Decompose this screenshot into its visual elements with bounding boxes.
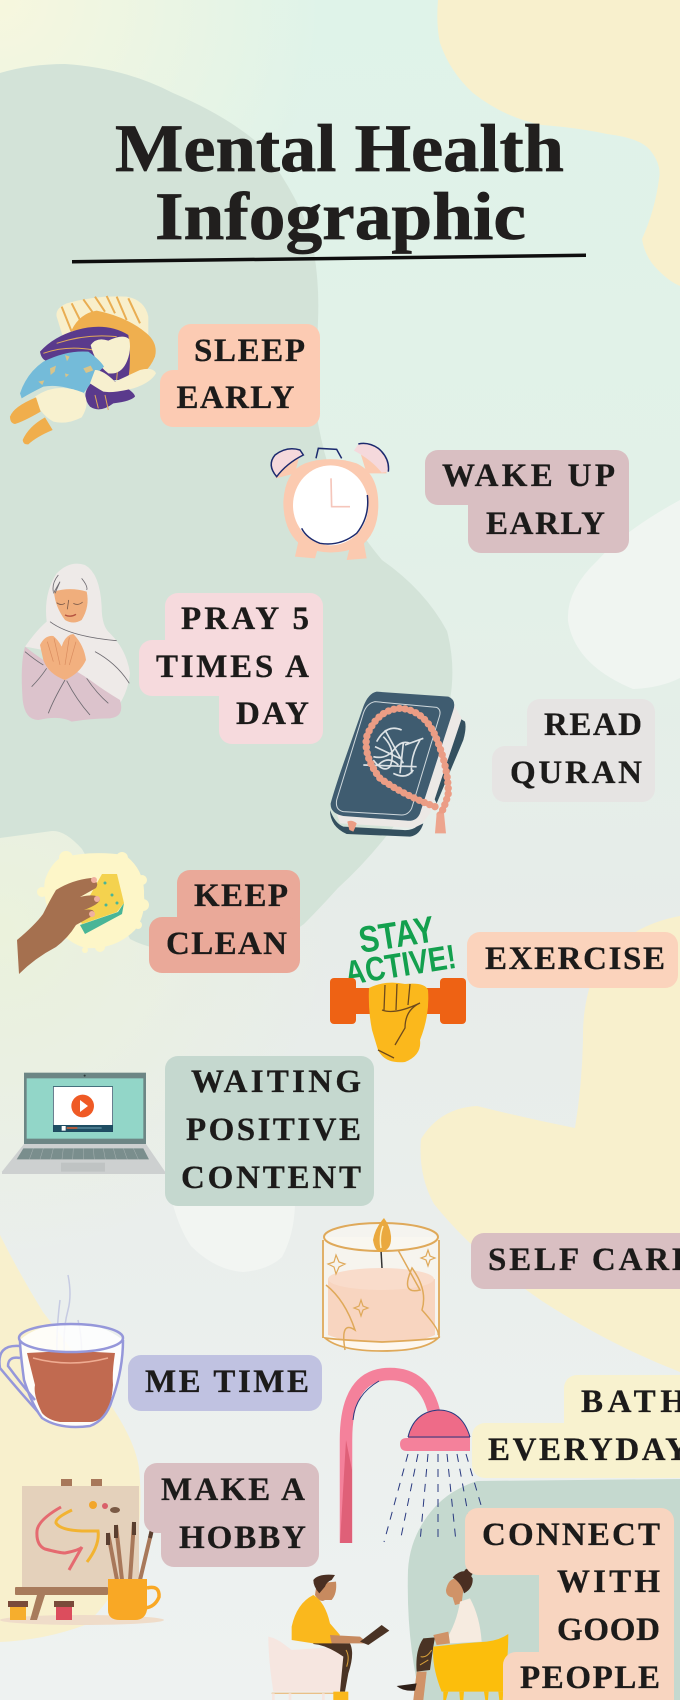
icon: candle	[323, 1218, 439, 1351]
title: Infographic	[155, 178, 526, 254]
label: pray 5 times a day: DAY	[236, 696, 309, 732]
label: keep clean	[149, 870, 300, 973]
label: sleep early: EARLY	[176, 380, 295, 416]
icon: stay active dumbbell: STAY	[356, 908, 438, 961]
label: connect with good people	[465, 1508, 674, 1700]
icon: sleeping woman	[10, 296, 156, 444]
icon: two people talking	[268, 1568, 508, 1700]
label: connect with good people: CONNECT	[482, 1517, 660, 1553]
icon: easel with paint brushes	[0, 1479, 164, 1625]
label: waiting positive content: POSITIVE	[186, 1112, 361, 1148]
label: connect with good people: PEOPLE	[520, 1660, 660, 1696]
label: me time	[128, 1355, 322, 1411]
label: pray 5 times a day: PRAY 5	[181, 601, 309, 637]
label: wake up early	[425, 450, 629, 553]
icon: praying woman	[22, 564, 130, 722]
icon: alarm clock	[271, 443, 389, 560]
label: waiting positive content: WAITING	[191, 1064, 361, 1100]
label: make a hobby: MAKE A	[161, 1472, 305, 1508]
label: me time: ME TIME	[145, 1364, 309, 1400]
label: wake up early: WAKE UP	[442, 458, 615, 494]
label: sleep early: SLEEP	[194, 333, 305, 369]
icon: shower	[340, 1374, 481, 1543]
icon: cup of tea	[0, 1275, 123, 1427]
icon: stay active dumbbell	[330, 908, 466, 1062]
title: Mental Health	[115, 110, 564, 186]
label: wake up early: EARLY	[486, 506, 605, 542]
label: keep clean: CLEAN	[166, 926, 287, 962]
icon: laptop with video	[2, 1073, 165, 1174]
label: waiting positive content: CONTENT	[181, 1160, 361, 1196]
label: self care	[471, 1233, 680, 1289]
icon: stay active dumbbell: ACTIVE!	[342, 938, 459, 993]
label: keep clean: KEEP	[194, 878, 288, 914]
title	[72, 110, 586, 264]
label: bath everyday	[472, 1375, 680, 1478]
icon: hand with sponge	[17, 851, 149, 974]
label: make a hobby	[144, 1463, 319, 1567]
label: connect with good people: WITH	[557, 1564, 660, 1600]
label: read quran: READ	[544, 707, 642, 743]
label: make a hobby: HOBBY	[179, 1520, 306, 1556]
label: waiting positive content	[165, 1056, 374, 1206]
label: exercise: EXERCISE	[485, 941, 665, 977]
label: read quran: QURAN	[510, 755, 642, 791]
label: exercise	[467, 932, 678, 988]
label: sleep early	[160, 324, 320, 427]
label: pray 5 times a day	[139, 593, 323, 744]
label: connect with good people: GOOD	[557, 1612, 660, 1648]
label: pray 5 times a day: TIMES A	[156, 649, 309, 685]
icon: quran with prayer beads	[330, 692, 466, 837]
label: read quran	[492, 699, 655, 802]
